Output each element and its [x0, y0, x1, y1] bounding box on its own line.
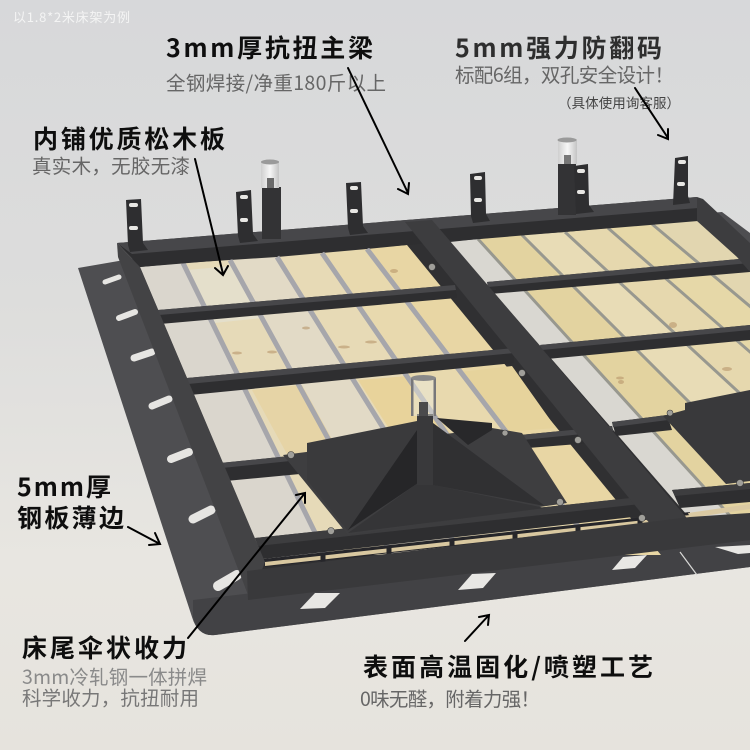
pine planks: left bay — [140, 245, 661, 565]
callout: main beam: 3mm厚抗扭主梁 — [166, 29, 373, 65]
front rail — [247, 513, 750, 600]
callout: pine boards: 真实木，无胶无漆 — [32, 150, 190, 179]
arrow: steel plate edge — [128, 527, 160, 545]
right rail — [697, 197, 750, 272]
bracket 5 — [574, 164, 594, 214]
steel base plate — [78, 212, 750, 635]
bar row 4 right — [672, 483, 750, 508]
front floor — [348, 483, 545, 533]
right face — [433, 423, 545, 506]
plank gaps — [478, 224, 750, 530]
callout: umbrella support: 3mm冷轧钢一体拼焊 — [22, 661, 207, 690]
back fin — [437, 418, 492, 445]
dark inner face — [348, 430, 418, 530]
bracket 4 — [470, 172, 490, 223]
bracket 1 — [126, 199, 148, 252]
callout: steel plate edge: 钢板薄边 — [17, 499, 124, 535]
arrow: anti-tip bracket — [635, 88, 668, 139]
note: bed size: 以1.8*2米床架为例 — [13, 7, 130, 26]
callout: powder coating: 0味无醛，附着力强！ — [360, 683, 540, 712]
left face — [307, 421, 417, 452]
callout: anti-tip bracket: 5mm强力防翻码 — [455, 29, 662, 65]
cross bars — [158, 258, 750, 559]
bar row 4 — [255, 497, 642, 559]
frame interior — [209, 232, 684, 569]
plank strip behind front rail — [263, 512, 690, 567]
callout: main beam — [166, 29, 386, 96]
bar row 2 left — [187, 348, 514, 395]
callout: umbrella support — [22, 629, 207, 711]
bar row 2 right — [540, 325, 750, 359]
support plate — [283, 428, 567, 535]
bolts — [288, 264, 744, 534]
anti-tip brackets — [126, 156, 690, 252]
center fan support — [283, 375, 567, 535]
bed frame illustration — [78, 138, 750, 635]
front plate section — [193, 535, 750, 635]
plate slots — [105, 277, 750, 609]
wood knots — [232, 269, 398, 354]
main beam — [405, 220, 692, 530]
arrow: pine boards — [195, 159, 228, 275]
left pillar with cap — [261, 160, 281, 239]
callout: pine boards — [32, 120, 225, 179]
bar row 1 right — [487, 258, 750, 294]
pillar — [417, 414, 433, 485]
bracket 3 — [346, 182, 368, 235]
callout: umbrella support: 科学收力，抗扭耐用 — [22, 682, 199, 711]
callout: steel plate edge: 5mm厚 — [17, 468, 111, 504]
callout: main beam: 全钢焊接/净重180斤以上 — [166, 67, 386, 96]
arrow: powder coating — [465, 615, 489, 641]
callout: anti-tip bracket — [455, 29, 680, 112]
callout: steel plate edge — [17, 468, 124, 535]
callout: anti-tip bracket: （具体使用询客服） — [558, 92, 680, 112]
left rail — [117, 243, 265, 600]
bar row 3 left — [223, 456, 299, 481]
clear cap — [411, 375, 436, 416]
wood knots — [616, 322, 732, 384]
arrow: umbrella support — [188, 493, 305, 638]
plank tone variation — [187, 266, 262, 323]
arrow: main beam — [348, 68, 409, 194]
callout: umbrella support: 床尾伞状收力 — [22, 629, 187, 665]
top rail — [117, 197, 698, 267]
plank strip right — [688, 504, 750, 518]
callout: powder coating: 表面高温固化/喷塑工艺 — [363, 648, 653, 684]
bar row 1 left — [158, 285, 457, 324]
plank gaps — [183, 249, 600, 555]
bar row 3 middle — [520, 426, 616, 448]
right pillar with cap — [558, 138, 577, 215]
callout: powder coating — [360, 648, 653, 712]
right fan support — [663, 390, 750, 484]
bar row 3 right — [612, 415, 672, 436]
callout: pine boards: 内铺优质松木板 — [33, 120, 225, 156]
bracket 2 — [236, 190, 258, 243]
bracket 6 — [673, 156, 690, 205]
callout: anti-tip bracket: 标配6组，双孔安全设计！ — [455, 59, 674, 88]
pine planks: right bay — [450, 220, 750, 530]
